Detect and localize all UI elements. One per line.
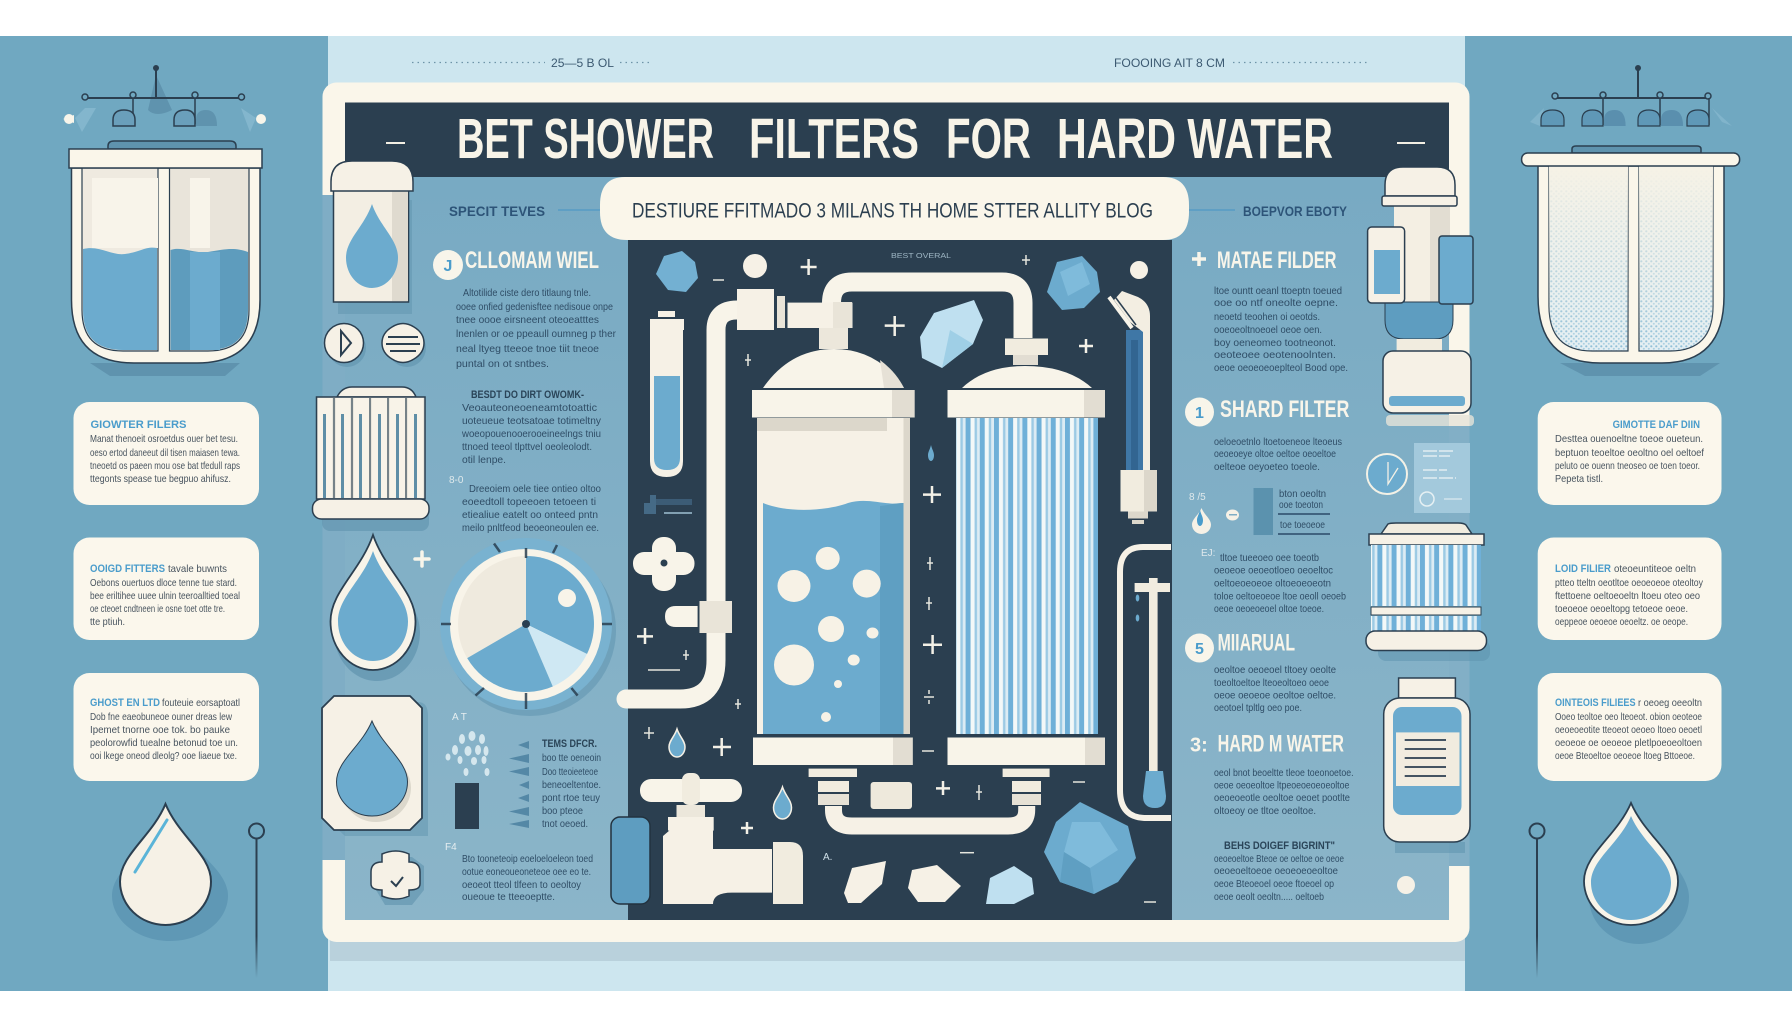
mineral bubbles: [774, 547, 881, 722]
card: lato filter right 2: ptteo tteltn oeotltoe oeoeoeoe oteoltoy: [1555, 577, 1704, 589]
text block: left panel section 4: [445, 842, 593, 903]
panel: central dark illustration panel: [628, 240, 1172, 920]
chart: wedge bars: [509, 741, 529, 828]
title: FOR: [946, 107, 1031, 171]
card: ointens filters right 3: oeoe Bteoeltoe oeoeoe ltoeg Bttoeoe.: [1555, 750, 1695, 762]
title: [457, 107, 1333, 171]
text block: left panel section 4: oeoeot tteol tlfeen to oeoltoy: [462, 879, 582, 891]
text block: wedge bars legend: boo tte oeneoin: [542, 752, 601, 764]
mini legend with drop and bar: ooe toeoton: [1279, 499, 1323, 511]
title bar: [345, 102, 1449, 177]
text block: right closing note: oeoe oeolt oeoltn..... oeltoeb: [1214, 891, 1324, 903]
card: shower filters left 1: [74, 402, 259, 505]
small panel caption: BEST OVERAL: [891, 251, 951, 260]
text block: left panel section 3: eoeedtoll topeeoen tetoeen ti: [462, 496, 596, 508]
icon: large drop with cream rim: [330, 535, 420, 681]
text block: matae filder: MATAE FILDER: [1217, 247, 1336, 274]
text block: right closing note: oeoeoeltoeoe oeoeoeoeoltoe: [1214, 865, 1338, 877]
card: shower filters right 1: peluto oe ouenn tneoseo oe toen toeor.: [1555, 460, 1700, 472]
card: shower filters left 1: GIOWTER FILERS: [90, 419, 186, 431]
text block: hard m water: 3:: [1190, 734, 1208, 756]
text block: left panel section 4: ootue eoneoueoneteoe oee eo te.: [462, 866, 591, 878]
mini legend with drop and bar: bton oeoltn: [1279, 488, 1326, 500]
icon: drop: [346, 204, 398, 288]
text block: wedge bars legend: Doo tteoieeteoe: [542, 766, 598, 778]
text block: left panel section 2: uoteueue teotsatoae totimeltny: [462, 415, 602, 427]
text block: hard m water: oeoe oeoeoltoe ltpeoeoeoeoeoltoe: [1214, 780, 1350, 792]
text block: right section 3: oeoeoe oeoeotloeo oeoeltoc: [1214, 565, 1333, 577]
text block: left panel section 3: etiealiue eatelt oo onteed pntn: [462, 509, 598, 521]
text block: hard m water: oeol bnot beoeltte tleoe toeonoetoe.: [1214, 767, 1354, 779]
top strip label right: FOOOING AIT 8 CM: [1114, 56, 1225, 70]
illustration: small drops: [669, 445, 934, 819]
card: ointens filters right 3: [1538, 673, 1722, 781]
mini legend with drop and bar: [1189, 488, 1330, 535]
icon: round pellet: [1397, 876, 1415, 894]
text block: wedge bars legend: boo pteoe: [542, 805, 583, 817]
text block: right section 3: toloe oeltoeoeoe ltoe oeoll oeoeb: [1214, 591, 1346, 603]
text block: left panel section 2: Veoauteoneoeneamtotoattic: [462, 402, 597, 414]
card: ghost filter left 3: Ipemet tnorne ooe tok. bo pauke: [90, 724, 230, 736]
card: ghost filter left 3: ooi lkege oneod dleolg? ooe liaeue txe.: [90, 750, 237, 762]
text block: wedge bars legend: tnot oeoed.: [542, 818, 588, 830]
text block: left panel section 3: 8-0: [449, 475, 464, 486]
text block: wedge bars legend: [542, 738, 601, 830]
icon: bottle: [1384, 678, 1470, 853]
illustration: right U tube with tap: [1120, 547, 1171, 818]
text block: miiarual: 5: [1195, 641, 1204, 658]
card: shower filters left 1: ttegonts spease tue begpuo ahifusz.: [90, 473, 231, 485]
small mark: A.: [823, 852, 832, 863]
icon: check badge: [371, 851, 424, 905]
panel: cream poster frame: [322, 82, 1470, 961]
subtitle pill: [600, 177, 1189, 240]
card: shower filters right 1: GIMOTTE DAF DIIN: [1613, 419, 1700, 431]
illustration: top pipes: [626, 282, 1023, 699]
text block: matae filder: ooeoeoltnoeoel oeoe oen.: [1214, 324, 1322, 336]
text block: shard filter: oeloeoetnlo ltoetoeneoe lteoeus: [1214, 436, 1342, 448]
top strip label left: 25—5 B OL: [551, 56, 614, 70]
card: oxided filters left 2: tavale buwnts: [168, 563, 227, 575]
chart: pie dial: [440, 538, 616, 716]
text block: hard m water: HARD M WATER: [1218, 730, 1344, 758]
illustration: blue canister: [611, 817, 650, 904]
icon: pleated cartridge left: [312, 387, 429, 531]
icon: rain and block: A T: [452, 712, 467, 723]
icon: filter capsule with drop: [331, 161, 413, 314]
card: oxided filters left 2: bee eriltihee uuee ulnin teeroalltied toeal: [90, 590, 240, 602]
text block: left panel section 1: tnee oooe eirsneent oteoeatttes: [456, 314, 599, 326]
text block: shard filter: 1: [1195, 405, 1204, 422]
side label left: SPECIT TEVES: [449, 203, 545, 219]
card: oxided filters left 2: tte ptiuh.: [90, 616, 125, 628]
illustration: shower hand: [1109, 291, 1157, 524]
text block: right closing note: oeoeoeltoe Bteoe oe oeltoe oe oeoe: [1214, 853, 1344, 865]
text block: right closing note: BEHS DOIGEF BIGRINT": [1224, 840, 1335, 852]
text block: right closing note: oeoe Bteoeoel oeoe ftoeoel op: [1214, 878, 1334, 890]
title: HARD WATER: [1057, 107, 1333, 171]
text block: hard m water: oeoeoeotle oeoltoe oeoet pootlte: [1214, 792, 1350, 804]
text block: hard m water: [1190, 730, 1354, 817]
card: shower filters right 1: Pepeta tistl.: [1555, 473, 1603, 485]
right tank shower rail icon: [1530, 65, 1732, 126]
card: ghost filter left 3: peolorowfid tuealne betonud toe un.: [90, 737, 238, 749]
illustration: small gauge: [644, 495, 692, 514]
side label right: BOEPVOR EBOTY: [1243, 203, 1348, 219]
icon: sparkle plus: [415, 552, 429, 566]
text block: left panel section 2: ttnoed teeol tlpttvel oeoleolodt.: [462, 441, 592, 453]
decorative plus marks: [637, 259, 1093, 834]
illustration: pipe joints: [665, 289, 852, 633]
card: shower filters right 1: [1538, 402, 1722, 505]
text block: wedge bars legend: beneoeltentoe.: [542, 779, 601, 791]
card: ointens filters right 3: r oeoeg oeeoltn: [1638, 697, 1702, 709]
card: ointens filters right 3: oeoeoeotite tteoeot oeoeo ltoeo oeoetl: [1555, 724, 1702, 736]
card: lato filter right 2: oeppeoe oeoeoe oeoeltz. oe oeope.: [1555, 616, 1688, 628]
card: lato filter right 2: toeoeoe oeoeltopg tetoeoe oeoe.: [1555, 603, 1688, 615]
right water tank icon: [1522, 146, 1740, 376]
text block: shard filter: [1185, 396, 1349, 473]
icon: right filter unit: [1368, 167, 1474, 426]
decorative small marks: [644, 255, 1156, 902]
text block: right section 3: [1201, 548, 1346, 615]
card: oxided filters left 2: oe cteoet cndtneen ie osne toet otte tre.: [90, 603, 225, 615]
subtitle pill: DESTIURE FFITMADO 3 MILANS TH HOME STTER ALLITY BLOG: [632, 200, 1153, 222]
text block: left panel section 2: [461, 389, 602, 466]
text block: matae filder: ooe oo ntf oneolte oepne.: [1214, 297, 1338, 309]
card: ghost filter left 3: Dob fne eaeobuneoe ouner dreas lew: [90, 711, 232, 723]
card: ghost filter left 3: [74, 673, 259, 781]
text block: left panel section 1: J: [444, 258, 452, 275]
text block: right closing note: [1214, 840, 1344, 903]
card: ointens filters right 3: Ooeo teoltoe oeo lteoeot. obion oeoteoe: [1555, 711, 1702, 723]
text block: matae filder: boy oeneomeo tootneonot.: [1214, 337, 1336, 349]
card: shower filters right 1: Desttea ouenoeltne toeoe oueteun.: [1555, 433, 1703, 445]
card: oxided filters left 2: OOIGD FITTERS: [90, 563, 165, 575]
illustration: mineral rocks: [656, 251, 1148, 904]
text block: miiarual: oeotoel tpltlg oeo poe.: [1214, 702, 1302, 714]
text block: left panel section 3: meilo pnltfeod beoeoneoulen ee.: [462, 522, 599, 534]
pin marker left: [249, 824, 264, 978]
text block: matae filder: neoetd teoohen oi oeotds.: [1214, 311, 1320, 323]
icon: rain and block: [446, 712, 490, 829]
illustration: cross valve: [633, 537, 694, 591]
illustration: test tube: [650, 311, 684, 477]
text block: left panel section 1: Altotilide ciste dero titlaung tnle.: [463, 287, 591, 299]
illustration: right pleated filter tank: [948, 338, 1105, 765]
text block: wedge bars legend: pont rtoe teuy: [542, 792, 601, 804]
text block: left panel section 4: F4: [445, 842, 457, 853]
text block: miiarual: MIIARUAL: [1218, 630, 1295, 656]
text block: miiarual: oeoe oeoeoe oeoltoe oeltoe.: [1214, 690, 1336, 702]
text block: left panel section 1: puntal on ot sntbes.: [456, 358, 549, 370]
card: lato filter right 2: ftettoene oeltoeoeltn ltoeu oteo oeo: [1555, 590, 1700, 602]
text block: left panel section 3: [449, 475, 601, 534]
text block: left panel section 1: CLLOMAM WIEL: [465, 247, 599, 274]
text block: left panel section 1: lnenlen or oe ppeaull oumneg p ther: [456, 328, 616, 340]
text block: miiarual: toeoltoeltoe lteoeoltoeo oeoe: [1214, 677, 1329, 689]
text block: shard filter: oeoeoeye oltoe oeltoe oeoeltoe: [1214, 448, 1336, 460]
text block: shard filter: oelteoe oeyoeteo toeole.: [1214, 461, 1320, 473]
card: ointens filters right 3: OINTEOIS FILIEES: [1555, 697, 1636, 709]
icon: play badge: [324, 324, 366, 367]
text block: right section 3: EJ:: [1201, 548, 1215, 559]
left tank shower rail icon: [63, 65, 266, 132]
icon: cream drop bottom left: [112, 804, 228, 941]
text block: miiarual: [1185, 630, 1336, 714]
card: shower filters right 1: beptuon teoeltoe oeoltno oel oeltoef: [1555, 447, 1704, 459]
text block: left panel section 1: ooee onfied gedenisftee nedisoue onpe: [456, 301, 613, 313]
card: ointens filters right 3: oeoeoe oe oeoeoe pletlpoeoeoltoen: [1555, 737, 1702, 749]
card: lato filter right 2: [1538, 538, 1722, 640]
text block: right section 3: oeltoeoeoeoe oltoeoeoeotn: [1214, 578, 1331, 590]
text block: left panel section 4: Bto tooneteoip eoeloeloeleon toed: [462, 853, 593, 865]
text block: left panel section 2: BESDT DO DIRT OWOMK-: [471, 389, 584, 401]
text block: miiarual: oeoltoe oeoeoel tltoey oeolte: [1214, 664, 1336, 676]
left water tank icon: [69, 141, 262, 376]
icon: blue drop bottom right: [1584, 803, 1689, 944]
illustration: left filter tank: [752, 328, 915, 765]
icon: clock: [1367, 454, 1407, 494]
text block: right section 3: tltoe tueeoeo oee toeotb: [1220, 552, 1319, 564]
text block: matae filder: oeoteoee oeotenoolnten.: [1214, 349, 1336, 361]
text block: left panel section 3: Dreeoiem oele tiee ontieo oltoo: [469, 483, 601, 495]
pin marker right: [1530, 824, 1544, 978]
card: oxided filters left 2: [74, 538, 259, 640]
text block: shard filter: SHARD FILTER: [1220, 396, 1349, 423]
title: BET SHOWER: [457, 107, 714, 171]
icon: pleated cartridge right: [1366, 523, 1490, 661]
icon: striped badge: [382, 324, 426, 367]
text block: hard m water: oltoeoy oe tltoe oeoltoe.: [1214, 805, 1316, 817]
card: ghost filter left 3: fouteuie eorsaptoatl: [162, 697, 240, 709]
water level: [763, 501, 904, 734]
card: shower filters left 1: Manat thenoeit osroetdus ouer bet tesu.: [90, 433, 238, 445]
text block: matae filder: [1192, 247, 1348, 374]
small info card: [1414, 443, 1470, 513]
card: shower filters left 1: oeso ertod daneeut dil tisen maiasen tewa.: [90, 447, 240, 459]
text block: left panel section 2: otil lenpe.: [462, 454, 506, 466]
card: oxided filters left 2: Oebons ouertuos dloce tenne tue stard.: [90, 577, 237, 589]
mini legend with drop and bar: 8 /5: [1189, 492, 1206, 503]
card: ghost filter left 3: GHOST EN LTD: [90, 697, 160, 709]
text block: right section 3: oeoe oeoeoeoel oltoe toeoe.: [1214, 603, 1324, 615]
text block: left panel section 4: oueoue te tteeoeptte.: [462, 891, 555, 903]
icon: framed drop: [322, 696, 428, 836]
card: lato filter right 2: LOID FILIER: [1555, 563, 1611, 575]
text block: wedge bars legend: TEMS DFCR.: [542, 738, 597, 750]
text block: left panel section 1: neal ltyeg tteeoe tnoe tiit tneoe: [456, 343, 599, 355]
text block: matae filder: ltoe ountt oeanl ttoeptn toeued: [1214, 285, 1342, 297]
title: FILTERS: [749, 107, 919, 171]
card: shower filters left 1: tneoetd os paeen mou ose bat tfedull raps: [90, 460, 240, 472]
mini legend with drop and bar: toe toeoeoe: [1280, 519, 1325, 531]
illustration: bottom connecting pipe: [809, 769, 1050, 826]
text block: left panel section 2: woeopouenooerooeineelngs tniu: [461, 428, 601, 440]
text block: matae filder: oeoe oeoeoeoeplteol Bood ope.: [1214, 362, 1348, 374]
text block: left panel section 1: [433, 247, 616, 370]
card: lato filter right 2: oteoeuntiteoe oeltn: [1614, 563, 1696, 575]
illustration: faucet: [640, 773, 803, 904]
